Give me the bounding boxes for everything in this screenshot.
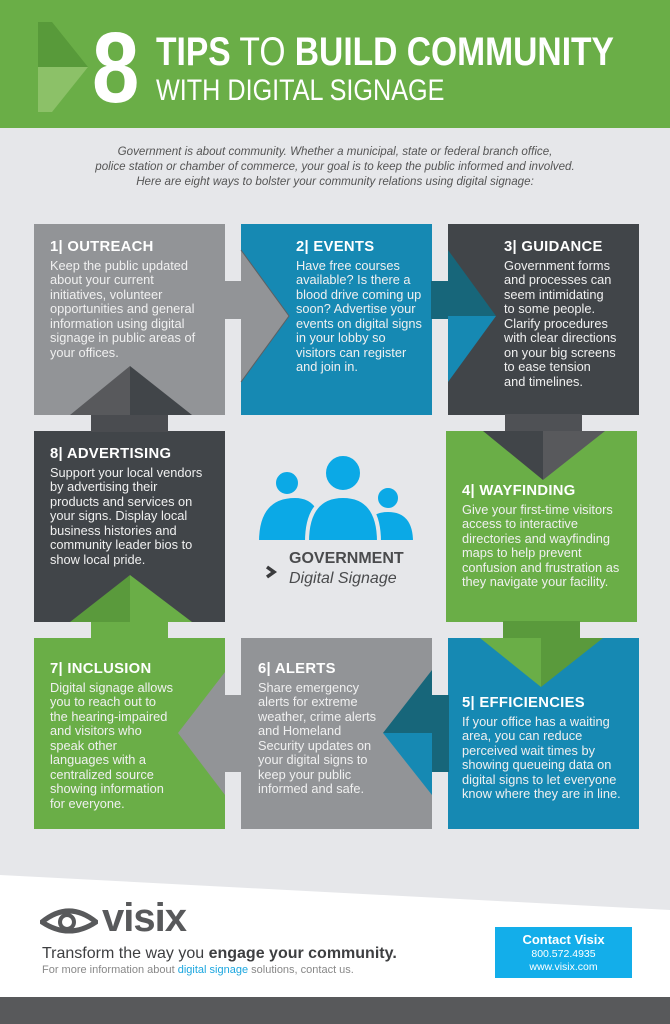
panel: box 3 background (448, 224, 639, 415)
text: 7 inclusion: for everyone. (50, 796, 125, 810)
text: 4 wayfinding (462, 483, 619, 589)
text: 7 inclusion: showing information (50, 781, 164, 796)
text: 8 advertising: business histories and (50, 522, 177, 538)
text: 7 inclusion: the hearing-impaired (50, 708, 167, 724)
text: 6 alerts: weather, crime alerts (258, 708, 376, 724)
text: 4 wayfinding: directories and wayfinding (462, 530, 610, 546)
text: 7 inclusion: Digital signage allows (50, 680, 173, 694)
text: 3 guidance: to some people. (504, 301, 595, 316)
arrow: 3 to 4 (483, 414, 605, 480)
logo: visix: visix (102, 896, 186, 940)
text: 5 efficiencies: showing queueing data on (462, 757, 611, 772)
text: 3 guidance: on your big screens (504, 344, 616, 360)
text: 2 events: events on digital signs (296, 316, 422, 330)
text: 7 inclusion: languages with a (50, 752, 146, 767)
text: 3 guidance (504, 239, 616, 388)
intro text: Government is about community. Whether a municipal, state or federal branch office, (118, 145, 552, 158)
text: 4 wayfinding: maps to help prevent (462, 545, 582, 560)
text: 2 events: available? Is there a (296, 272, 411, 287)
text: 5 efficiencies (462, 695, 621, 801)
text: 1 outreach: opportunities and general (50, 301, 194, 316)
text: 4 wayfinding: access to interactive (462, 516, 578, 531)
text: 2 events: blood drive coming up (296, 286, 421, 302)
text: 3 guidance: and timelines. (504, 374, 583, 388)
arrow: 4 to 5 (480, 621, 603, 687)
bottom bar (0, 997, 670, 1024)
text: 2 events: in your lobby so (296, 330, 386, 345)
text: 3 guidance: 3| GUIDANCE (504, 239, 603, 255)
text: 3 guidance: to ease tension (504, 359, 591, 374)
text: 4 wayfinding: 4| WAYFINDING (462, 483, 576, 499)
text: 3 guidance: Clarify procedures (504, 316, 608, 330)
contact box: Contact Visix (522, 932, 605, 947)
panel: box 6 background (241, 638, 432, 829)
text: 7 inclusion: you to reach out to (50, 694, 156, 709)
arrow: 7 to 8 (70, 575, 192, 639)
sub tagline: For more information about digital signage solutions, contact us. (42, 964, 354, 976)
text: 5 efficiencies: perceived wait times by (462, 742, 595, 758)
text: 1 outreach: your offices. (50, 344, 119, 360)
text: 4 wayfinding: they navigate your facility. (462, 574, 608, 589)
intro text: police station or chamber of commerce, your goal is to keep the public informed and involved. (95, 160, 575, 173)
text: 8 advertising: your signs. Display local (50, 508, 187, 523)
arrow: 5 to 6 (383, 670, 449, 795)
text: 6 alerts: Security updates on (258, 738, 371, 752)
text: 8 advertising: community leader bios to (50, 537, 192, 552)
text: 2 events: visitors can register (296, 344, 406, 360)
text: 4 wayfinding: Give your first-time visitors (462, 502, 613, 516)
text: 7 inclusion: and visitors who (50, 723, 142, 738)
text: 2 events: and join in. (296, 359, 358, 374)
text: 8 advertising: 8| ADVERTISING (50, 446, 171, 462)
text: 8 advertising (50, 446, 202, 566)
title number 8: 8 (92, 12, 139, 124)
logo: visix (40, 896, 187, 940)
text: 8 advertising: show local pride. (50, 552, 145, 566)
text: 1 outreach: initiatives, volunteer (50, 286, 162, 302)
text: 3 guidance: with clear directions (504, 330, 616, 345)
contact box: www.visix.com (529, 961, 598, 973)
text: 3 guidance: and processes can (504, 272, 611, 287)
text: 7 inclusion: centralized source (50, 766, 154, 782)
text: 6 alerts (258, 661, 376, 796)
text: 2 events (296, 239, 422, 374)
text: 6 alerts: and Homeland (258, 723, 341, 738)
panel: box 4 background (446, 431, 637, 622)
text: 6 alerts: keep your public (258, 766, 351, 782)
intro text: Here are eight ways to bolster your community relations using digital signage: (136, 175, 534, 188)
text: 1 outreach: Keep the public updated (50, 258, 188, 272)
text: 5 efficiencies: 5| EFFICIENCIES (462, 695, 585, 711)
text: 7 inclusion: 7| INCLUSION (50, 661, 151, 677)
text: 5 efficiencies: digital signs to let everyone (462, 772, 616, 786)
arrow: 6 to 7 (178, 672, 242, 795)
text: 3 guidance: seem intimidating (504, 286, 604, 302)
text: 8 advertising: products and services on (50, 494, 192, 508)
contact box (495, 927, 632, 978)
title (156, 30, 614, 107)
header band (0, 0, 670, 128)
text: 8 advertising: Support your local vendors (50, 464, 202, 480)
text: 2 events: 2| EVENTS (296, 239, 374, 255)
text: 5 efficiencies: area, you can reduce (462, 728, 582, 743)
contact box: 800.572.4935 (531, 948, 596, 960)
text: 1 outreach: signage in public areas of (50, 330, 195, 345)
text: 1 outreach (50, 239, 196, 360)
footer white area (0, 875, 670, 997)
text: 6 alerts: informed and safe. (258, 781, 364, 796)
center icon: people (259, 456, 413, 540)
text: 1 outreach: 1| OUTREACH (50, 239, 154, 255)
arrow: 1 to 2 (224, 250, 289, 382)
text: 5 efficiencies: know where they are in line. (462, 786, 621, 801)
text: 4 wayfinding: confusion and frustration as (462, 560, 619, 574)
text: 8 advertising: by advertising their (50, 479, 157, 494)
panel: box 2 background (241, 224, 432, 415)
icon: chevron (266, 566, 277, 578)
text: 6 alerts: alerts for extreme (258, 694, 358, 709)
arrow: 8 to 1 (70, 366, 192, 432)
panel: box 7 background (34, 638, 225, 829)
panel: box 1 background (34, 224, 225, 415)
intro text (95, 145, 575, 188)
text: 3 guidance: Government forms (504, 258, 610, 272)
icon: header arrow (38, 22, 88, 112)
arrow: 2 to 3 (431, 250, 496, 382)
title: TIPS TO BUILD COMMUNITY (156, 30, 614, 74)
text: 2 events: soon? Advertise your (296, 301, 416, 316)
center label (266, 550, 404, 587)
center label: GOVERNMENT (289, 550, 404, 567)
text: 1 outreach: information using digital (50, 316, 184, 330)
text: 1 outreach: about your current (50, 272, 154, 287)
center label: Digital Signage (289, 570, 397, 587)
text: 6 alerts: Share emergency (258, 680, 359, 694)
text: 6 alerts: your digital signs to (258, 752, 368, 767)
tagline: Transform the way you engage your community. (42, 945, 397, 962)
title: WITH DIGITAL SIGNAGE (156, 74, 444, 107)
text: 2 events: Have free courses (296, 258, 400, 272)
text: 6 alerts: 6| ALERTS (258, 661, 336, 677)
panel: box 5 background (448, 638, 639, 829)
panel: box 8 background (34, 431, 225, 622)
text: 5 efficiencies: If your office has a waiting (462, 714, 610, 728)
text: 7 inclusion (50, 661, 173, 810)
text: 7 inclusion: speak other (50, 738, 117, 752)
